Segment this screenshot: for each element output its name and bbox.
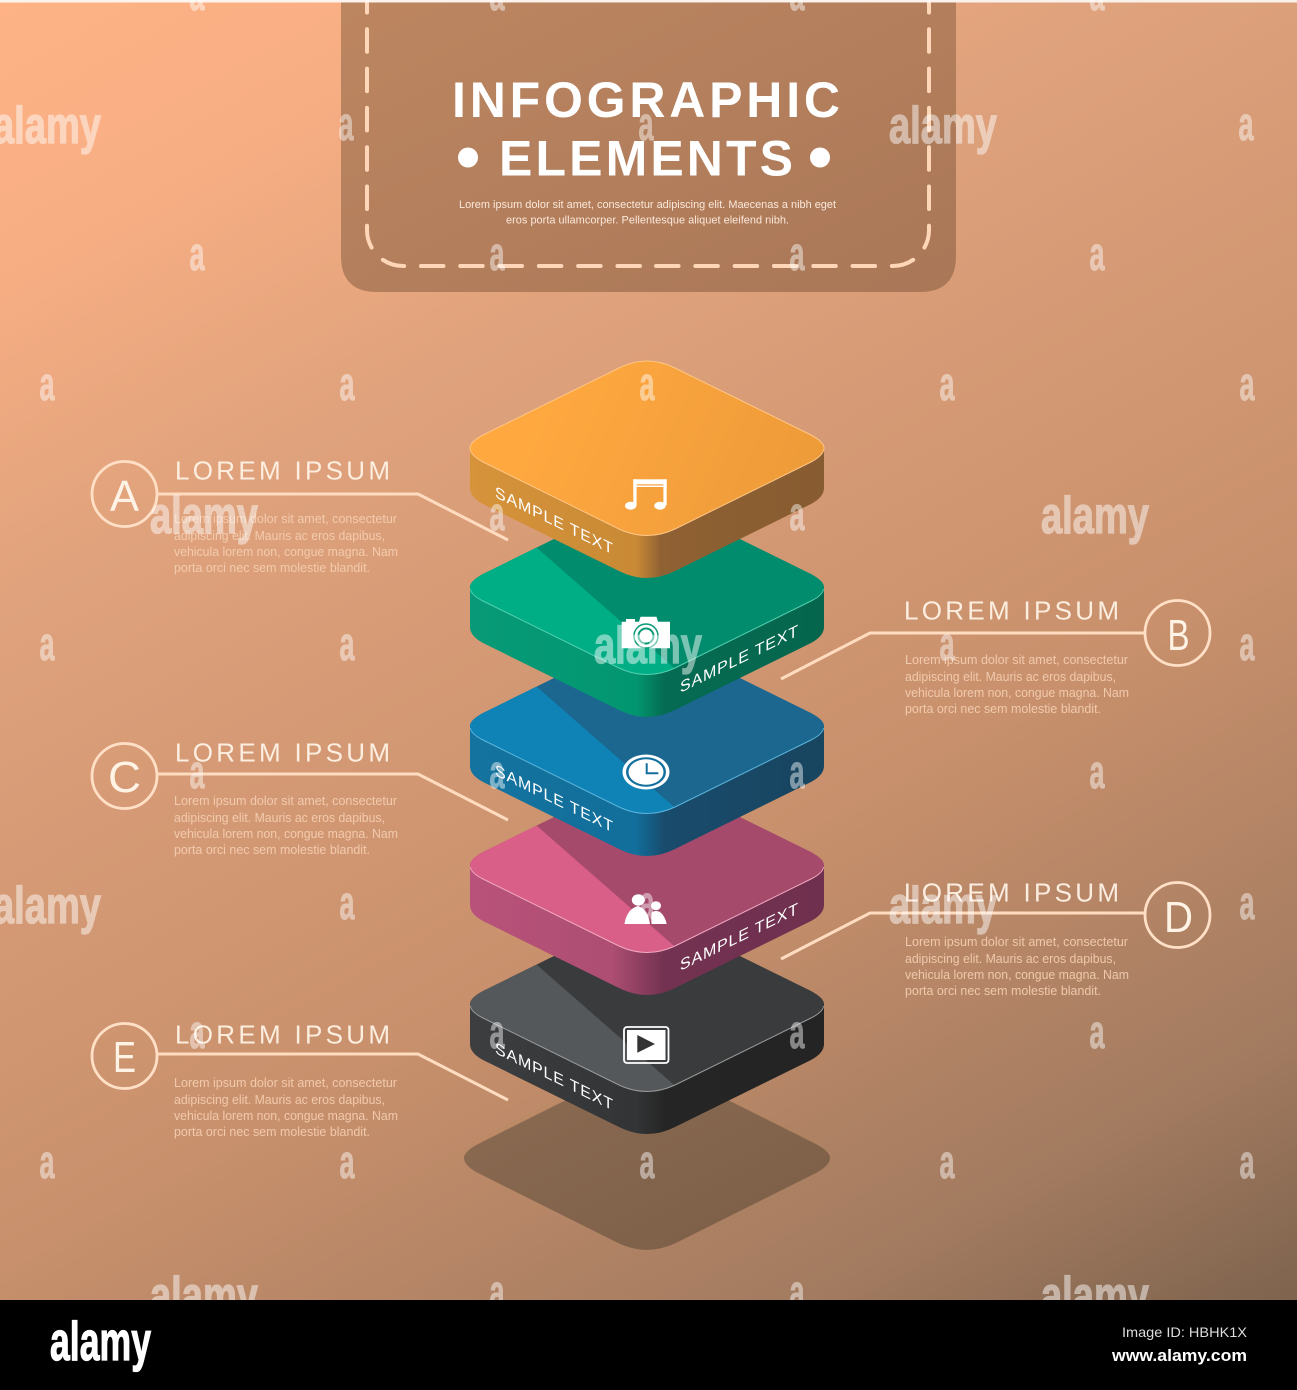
icon: camera — [622, 617, 670, 648]
stock watermarks: alamy — [150, 1267, 258, 1325]
stock watermarks: a — [1238, 97, 1254, 150]
body text B — [905, 653, 1129, 716]
stock watermarks: a — [640, 357, 655, 410]
stock watermarks: alamy — [1041, 1267, 1149, 1325]
badge E: E — [113, 1033, 136, 1082]
heading E: LOREM IPSUM — [175, 1020, 390, 1050]
stock watermarks: a — [790, 1005, 805, 1058]
body text A: vehicula lorem non, congue magna. Nam — [174, 545, 398, 559]
stock watermarks: a — [340, 876, 355, 929]
stock watermarks: a — [940, 617, 955, 670]
body text C — [174, 794, 398, 857]
stock watermarks: alamy — [594, 617, 702, 675]
stock watermarks: a — [490, 487, 505, 540]
body text D: adipiscing elit. Mauris ac eros dapibus, — [905, 952, 1116, 966]
stock watermarks: a — [340, 617, 355, 670]
callout C — [92, 738, 508, 857]
body text B: porta orci nec sem molestie blandit. — [905, 702, 1101, 716]
stock watermarks: a — [940, 357, 955, 410]
stock watermarks: a — [490, 1005, 505, 1058]
block E: dark layer — [470, 956, 824, 1134]
stock watermarks: a — [1240, 876, 1255, 929]
block C: blue layer — [470, 678, 824, 856]
panel: header tag — [341, 0, 956, 292]
stock watermarks: a — [1240, 357, 1255, 410]
footer logo: alamy — [50, 1310, 151, 1372]
stock watermarks: a — [40, 1135, 55, 1188]
block A: orange layer — [470, 361, 824, 578]
icon: clock — [622, 754, 670, 790]
badge A: A — [110, 472, 140, 521]
stock watermarks: a — [1240, 1135, 1255, 1188]
heading B: LOREM IPSUM — [904, 596, 1119, 626]
badge B: B — [1168, 611, 1190, 660]
stock watermarks: a — [340, 1135, 355, 1188]
block D: pink layer — [470, 817, 824, 995]
stock watermarks: a — [790, 487, 805, 540]
stock watermarks: a — [490, 227, 505, 280]
header description: Lorem ipsum dolor sit amet, consectetur adipiscing elit. Maecenas a nibh eget — [459, 199, 836, 211]
stock watermarks: a — [1090, 1005, 1105, 1058]
stock watermarks: alamy — [1041, 487, 1149, 545]
body text E — [174, 1076, 398, 1139]
icon: play — [624, 1027, 668, 1063]
stock watermarks: a — [790, 745, 805, 798]
body text B: adipiscing elit. Mauris ac eros dapibus, — [905, 670, 1116, 684]
body text C: vehicula lorem non, congue magna. Nam — [174, 827, 398, 841]
leader line E — [156, 1054, 508, 1100]
badge A — [92, 462, 157, 526]
leader line C — [156, 774, 508, 820]
body text C: porta orci nec sem molestie blandit. — [174, 843, 370, 857]
callout D — [781, 878, 1210, 998]
stock watermarks: a — [340, 357, 355, 410]
icon: people — [624, 894, 667, 924]
body text D: porta orci nec sem molestie blandit. — [905, 984, 1101, 998]
side label C: SAMPLE TEXT — [495, 761, 613, 836]
stock watermarks: alamy — [889, 97, 997, 155]
footer url: www.alamy.com — [1111, 1346, 1247, 1365]
header description: eros porta ullamcorper. Pellentesque aliquet eleifend nibh. — [506, 214, 789, 226]
stock watermarks: a — [40, 357, 55, 410]
stock watermarks: a — [790, 227, 805, 280]
leader line A — [156, 494, 508, 540]
stock watermarks: a — [490, 745, 505, 798]
side label B: SAMPLE TEXT — [680, 621, 798, 697]
title line 2 with bullets: ELEMENTS — [499, 130, 793, 186]
body text D — [905, 935, 1129, 998]
stock watermarks: a — [338, 97, 354, 150]
body text D: Lorem ipsum dolor sit amet, consectetur — [905, 935, 1128, 949]
side label D: SAMPLE TEXT — [680, 899, 798, 975]
body text B: vehicula lorem non, congue magna. Nam — [905, 686, 1129, 700]
stock watermarks: alamy — [889, 877, 997, 935]
heading C: LOREM IPSUM — [175, 738, 390, 768]
stock watermarks: a — [1240, 617, 1255, 670]
footer bar — [0, 1300, 1297, 1390]
side label A: SAMPLE TEXT — [495, 483, 613, 558]
heading D: LOREM IPSUM — [904, 878, 1119, 908]
badge E — [92, 1024, 157, 1088]
stock watermarks: a — [940, 1135, 955, 1188]
badge B — [1145, 600, 1210, 666]
body text A — [174, 512, 398, 575]
stock watermarks: a — [640, 1135, 655, 1188]
badge C — [92, 744, 157, 808]
body text A: porta orci nec sem molestie blandit. — [174, 561, 370, 575]
body text E: adipiscing elit. Mauris ac eros dapibus, — [174, 1093, 385, 1107]
body text A: adipiscing elit. Mauris ac eros dapibus, — [174, 529, 385, 543]
stock watermarks: a — [640, 876, 655, 929]
callout E — [92, 1020, 508, 1139]
image id: Image ID: HBHK1X — [1122, 1324, 1248, 1340]
icon: music note — [625, 479, 667, 510]
stock watermarks: a — [190, 745, 205, 798]
body text C: Lorem ipsum dolor sit amet, consectetur — [174, 794, 397, 808]
stitched dashed border — [367, 0, 929, 266]
top edge line — [0, 0, 1297, 2]
title line 1: INFOGRAPHIC — [452, 72, 840, 128]
body text C: adipiscing elit. Mauris ac eros dapibus, — [174, 811, 385, 825]
block B: green layer — [470, 539, 824, 717]
body text D: vehicula lorem non, congue magna. Nam — [905, 968, 1129, 982]
badge D: D — [1164, 893, 1193, 942]
stock watermarks: a — [190, 1005, 205, 1058]
body text B: Lorem ipsum dolor sit amet, consectetur — [905, 653, 1128, 667]
stock watermarks: a — [40, 617, 55, 670]
side label E: SAMPLE TEXT — [495, 1039, 613, 1114]
ground shadow — [464, 1067, 830, 1250]
callout B — [781, 596, 1210, 716]
stock watermarks: a — [190, 227, 205, 280]
stock watermarks: a — [638, 97, 654, 150]
stock watermarks: a — [1090, 745, 1105, 798]
leader line D — [781, 913, 1145, 959]
callout A — [92, 456, 508, 575]
body text E: Lorem ipsum dolor sit amet, consectetur — [174, 1076, 397, 1090]
body text E: vehicula lorem non, congue magna. Nam — [174, 1109, 398, 1123]
heading A: LOREM IPSUM — [175, 456, 390, 486]
badge C: C — [108, 753, 141, 802]
stock watermarks: a — [1090, 227, 1105, 280]
header description — [459, 199, 836, 226]
body text E: porta orci nec sem molestie blandit. — [174, 1125, 370, 1139]
stock watermarks: alamy — [150, 487, 258, 545]
body text A: Lorem ipsum dolor sit amet, consectetur — [174, 512, 397, 526]
stock watermarks: a — [490, 1265, 505, 1318]
badge D — [1145, 882, 1210, 948]
stock watermarks: a — [790, 1265, 805, 1318]
leader line B — [781, 633, 1145, 679]
